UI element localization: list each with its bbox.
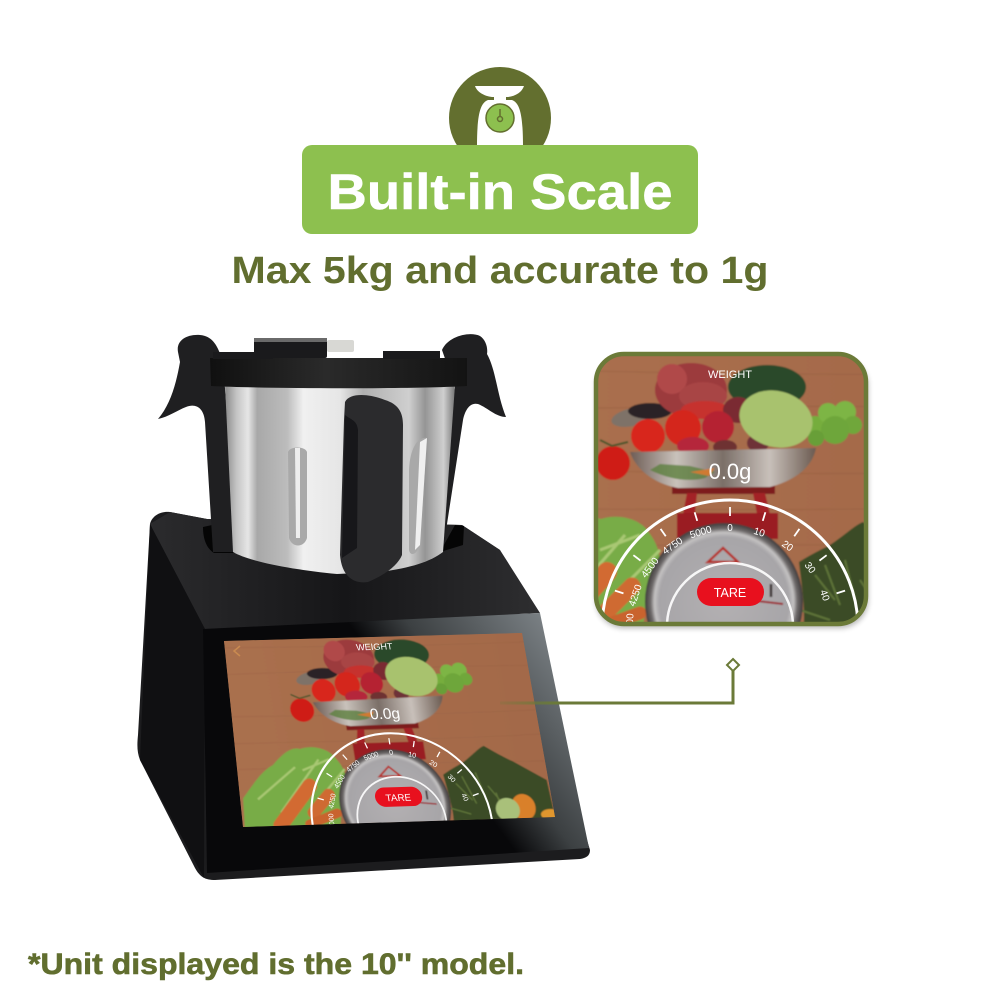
footnote: *Unit displayed is the 10'' model.	[28, 948, 524, 981]
connector arrow	[500, 659, 739, 703]
steel bowl	[225, 385, 455, 574]
back chevron	[234, 646, 240, 656]
right side handle	[420, 334, 506, 560]
subheading: Max 5kg and accurate to 1g	[232, 250, 768, 292]
zoomed scale inset	[592, 352, 872, 632]
screen dial overlay: 20	[428, 759, 438, 769]
lid top and knob	[213, 338, 440, 359]
screen dial overlay: 4500	[333, 774, 347, 790]
inset dial overlay: 4750	[661, 535, 686, 557]
screen dial overlay: TARE	[385, 793, 413, 804]
screen dial overlay: 30	[446, 774, 456, 784]
inset dial overlay: 4250	[627, 583, 645, 608]
inset dial overlay	[602, 370, 858, 622]
screen dial overlay: 0	[389, 750, 394, 757]
front panel bezel	[203, 613, 589, 873]
screen dial overlay: 0.0g	[369, 706, 401, 723]
side shading	[140, 524, 205, 878]
inset dial overlay: 5000	[689, 524, 714, 541]
product: multi-cooker	[137, 334, 590, 880]
bowl handle	[340, 395, 403, 582]
heading pill: Built-in Scale	[302, 145, 698, 234]
screen dial overlay: 40	[459, 793, 469, 802]
screen dial overlay: 4250	[328, 793, 338, 810]
base top surface	[150, 512, 540, 629]
lid band	[210, 358, 467, 388]
inset dial overlay: 30	[802, 560, 817, 576]
inset dial overlay: 4000	[625, 613, 636, 636]
screen dial overlay: WEIGHT	[355, 641, 394, 652]
inset dial overlay: 40	[817, 589, 831, 603]
inset dial overlay: 4500	[639, 556, 662, 580]
icon: kitchen scale badge	[449, 67, 551, 169]
heading pill: Built-in Scale: Built-in Scale	[328, 164, 672, 220]
inset dial overlay: 0.0g	[709, 459, 751, 484]
inset dial overlay: 20	[779, 539, 795, 554]
inset dial overlay: WEIGHT	[708, 369, 752, 381]
inset dial overlay: 0	[727, 523, 733, 534]
screen dial overlay: 4750	[345, 759, 362, 774]
pot recess	[203, 522, 464, 553]
machine base	[137, 512, 590, 880]
inset dial overlay: 10	[752, 526, 766, 540]
left side handle	[158, 335, 238, 552]
screen dial overlay: 10	[408, 751, 417, 760]
screen dial overlay: 4000	[328, 813, 337, 829]
main screen scale image	[224, 633, 555, 827]
screen dial overlay	[310, 643, 493, 825]
screen dial overlay: 5000	[363, 751, 380, 763]
inset dial overlay: TARE	[714, 586, 746, 600]
bowl embossed ribs	[288, 448, 307, 546]
